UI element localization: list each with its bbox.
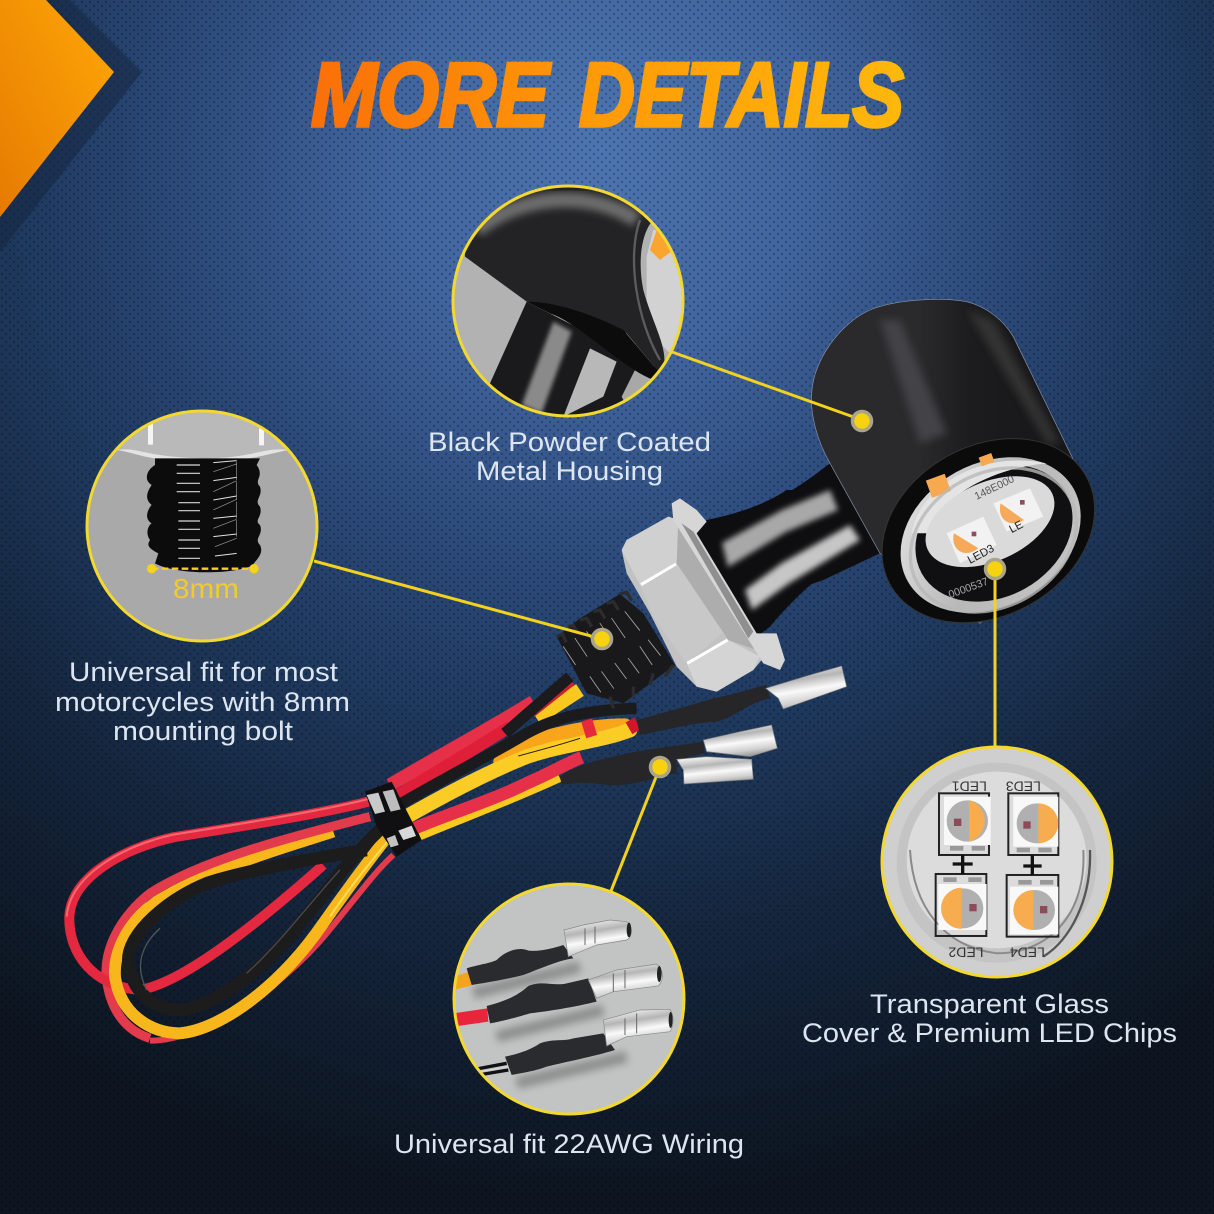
chip links (953, 855, 1042, 875)
housing (792, 299, 1096, 624)
chip top left (939, 793, 991, 855)
board markings: LED1 (952, 778, 987, 794)
chip markings: LE (1007, 519, 1026, 536)
caption: housing: Metal Housing (476, 456, 663, 486)
caption: mounting bolt: Universal fit for most (69, 657, 339, 687)
metal terminals (564, 920, 673, 1046)
connectors (560, 666, 847, 785)
threads (557, 592, 675, 708)
flange washer (672, 498, 785, 670)
wire loop (67, 799, 393, 1041)
cable clip (365, 782, 422, 857)
chip markings (947, 473, 1026, 601)
turn signal light (557, 299, 1127, 708)
leader line: wiring (611, 767, 660, 891)
caption: mounting bolt: mounting bolt (113, 716, 294, 746)
upper connector with shrink tube (637, 666, 847, 735)
housing body (460, 180, 664, 373)
caption: mounting bolt: motorcycles with 8mm (55, 687, 350, 717)
corner arrow (0, 0, 142, 252)
bezel (849, 402, 1127, 659)
title: DETAILS (579, 45, 904, 146)
chip markings: 0000537 (947, 576, 990, 601)
caption: mounting bolt (55, 657, 350, 746)
dimension line (147, 564, 259, 573)
shrink tubes (467, 945, 615, 1075)
title (311, 45, 904, 146)
board markings (948, 778, 1045, 960)
yellow wire bottom bend (115, 907, 323, 1033)
lens: bolt detail (85, 403, 325, 645)
stem highlights (722, 490, 860, 610)
title: MORE (311, 45, 551, 146)
leader line: thread (314, 561, 602, 639)
lower connectors with shrink tube (560, 725, 777, 785)
chip bottom left (936, 874, 987, 936)
stem (693, 490, 860, 637)
red wire inner loop (106, 817, 393, 1041)
hex nut (622, 517, 762, 692)
caption: glass cover: Cover & Premium LED Chips (802, 1018, 1177, 1048)
reflected board strip (912, 461, 1047, 533)
stem upper (780, 463, 880, 597)
nut (118, 412, 286, 458)
board markings: LED2 (948, 944, 983, 960)
leader line: LED (994, 569, 996, 747)
dimension label: 8mm (173, 573, 239, 604)
LED board (912, 458, 1068, 585)
threaded bolt and nut (557, 490, 860, 708)
lens: LED chips (880, 745, 1115, 980)
black wire (128, 823, 387, 1010)
board markings: LED3 (1006, 778, 1041, 794)
wire bundle (390, 677, 637, 837)
caption: glass cover: Transparent Glass (870, 989, 1109, 1019)
body highlight (880, 310, 1060, 443)
caption: housing (428, 427, 711, 486)
chip top right (1008, 793, 1058, 855)
lens: housing detail (450, 180, 690, 420)
board markings: LED4 (1010, 944, 1045, 960)
yellow wire (115, 832, 390, 1033)
caption: wiring: Universal fit 22AWG Wiring (394, 1129, 744, 1159)
stem bands (490, 302, 658, 414)
chips (947, 488, 1043, 563)
screw thread (147, 458, 261, 572)
caption: housing: Black Powder Coated (428, 427, 711, 457)
chip bottom right (1007, 875, 1058, 937)
caption: glass cover (802, 989, 1177, 1048)
lens: connector wiring (440, 880, 690, 1120)
leader line: housing (672, 352, 862, 420)
glass (646, 230, 682, 352)
bare wires (453, 972, 508, 1075)
glass (873, 426, 1108, 644)
marker dots (592, 412, 1004, 776)
body (811, 299, 1095, 623)
red wire outer loop (67, 799, 368, 990)
chip markings: LED3 (966, 543, 996, 567)
chip markings: 148E000 (973, 473, 1016, 503)
